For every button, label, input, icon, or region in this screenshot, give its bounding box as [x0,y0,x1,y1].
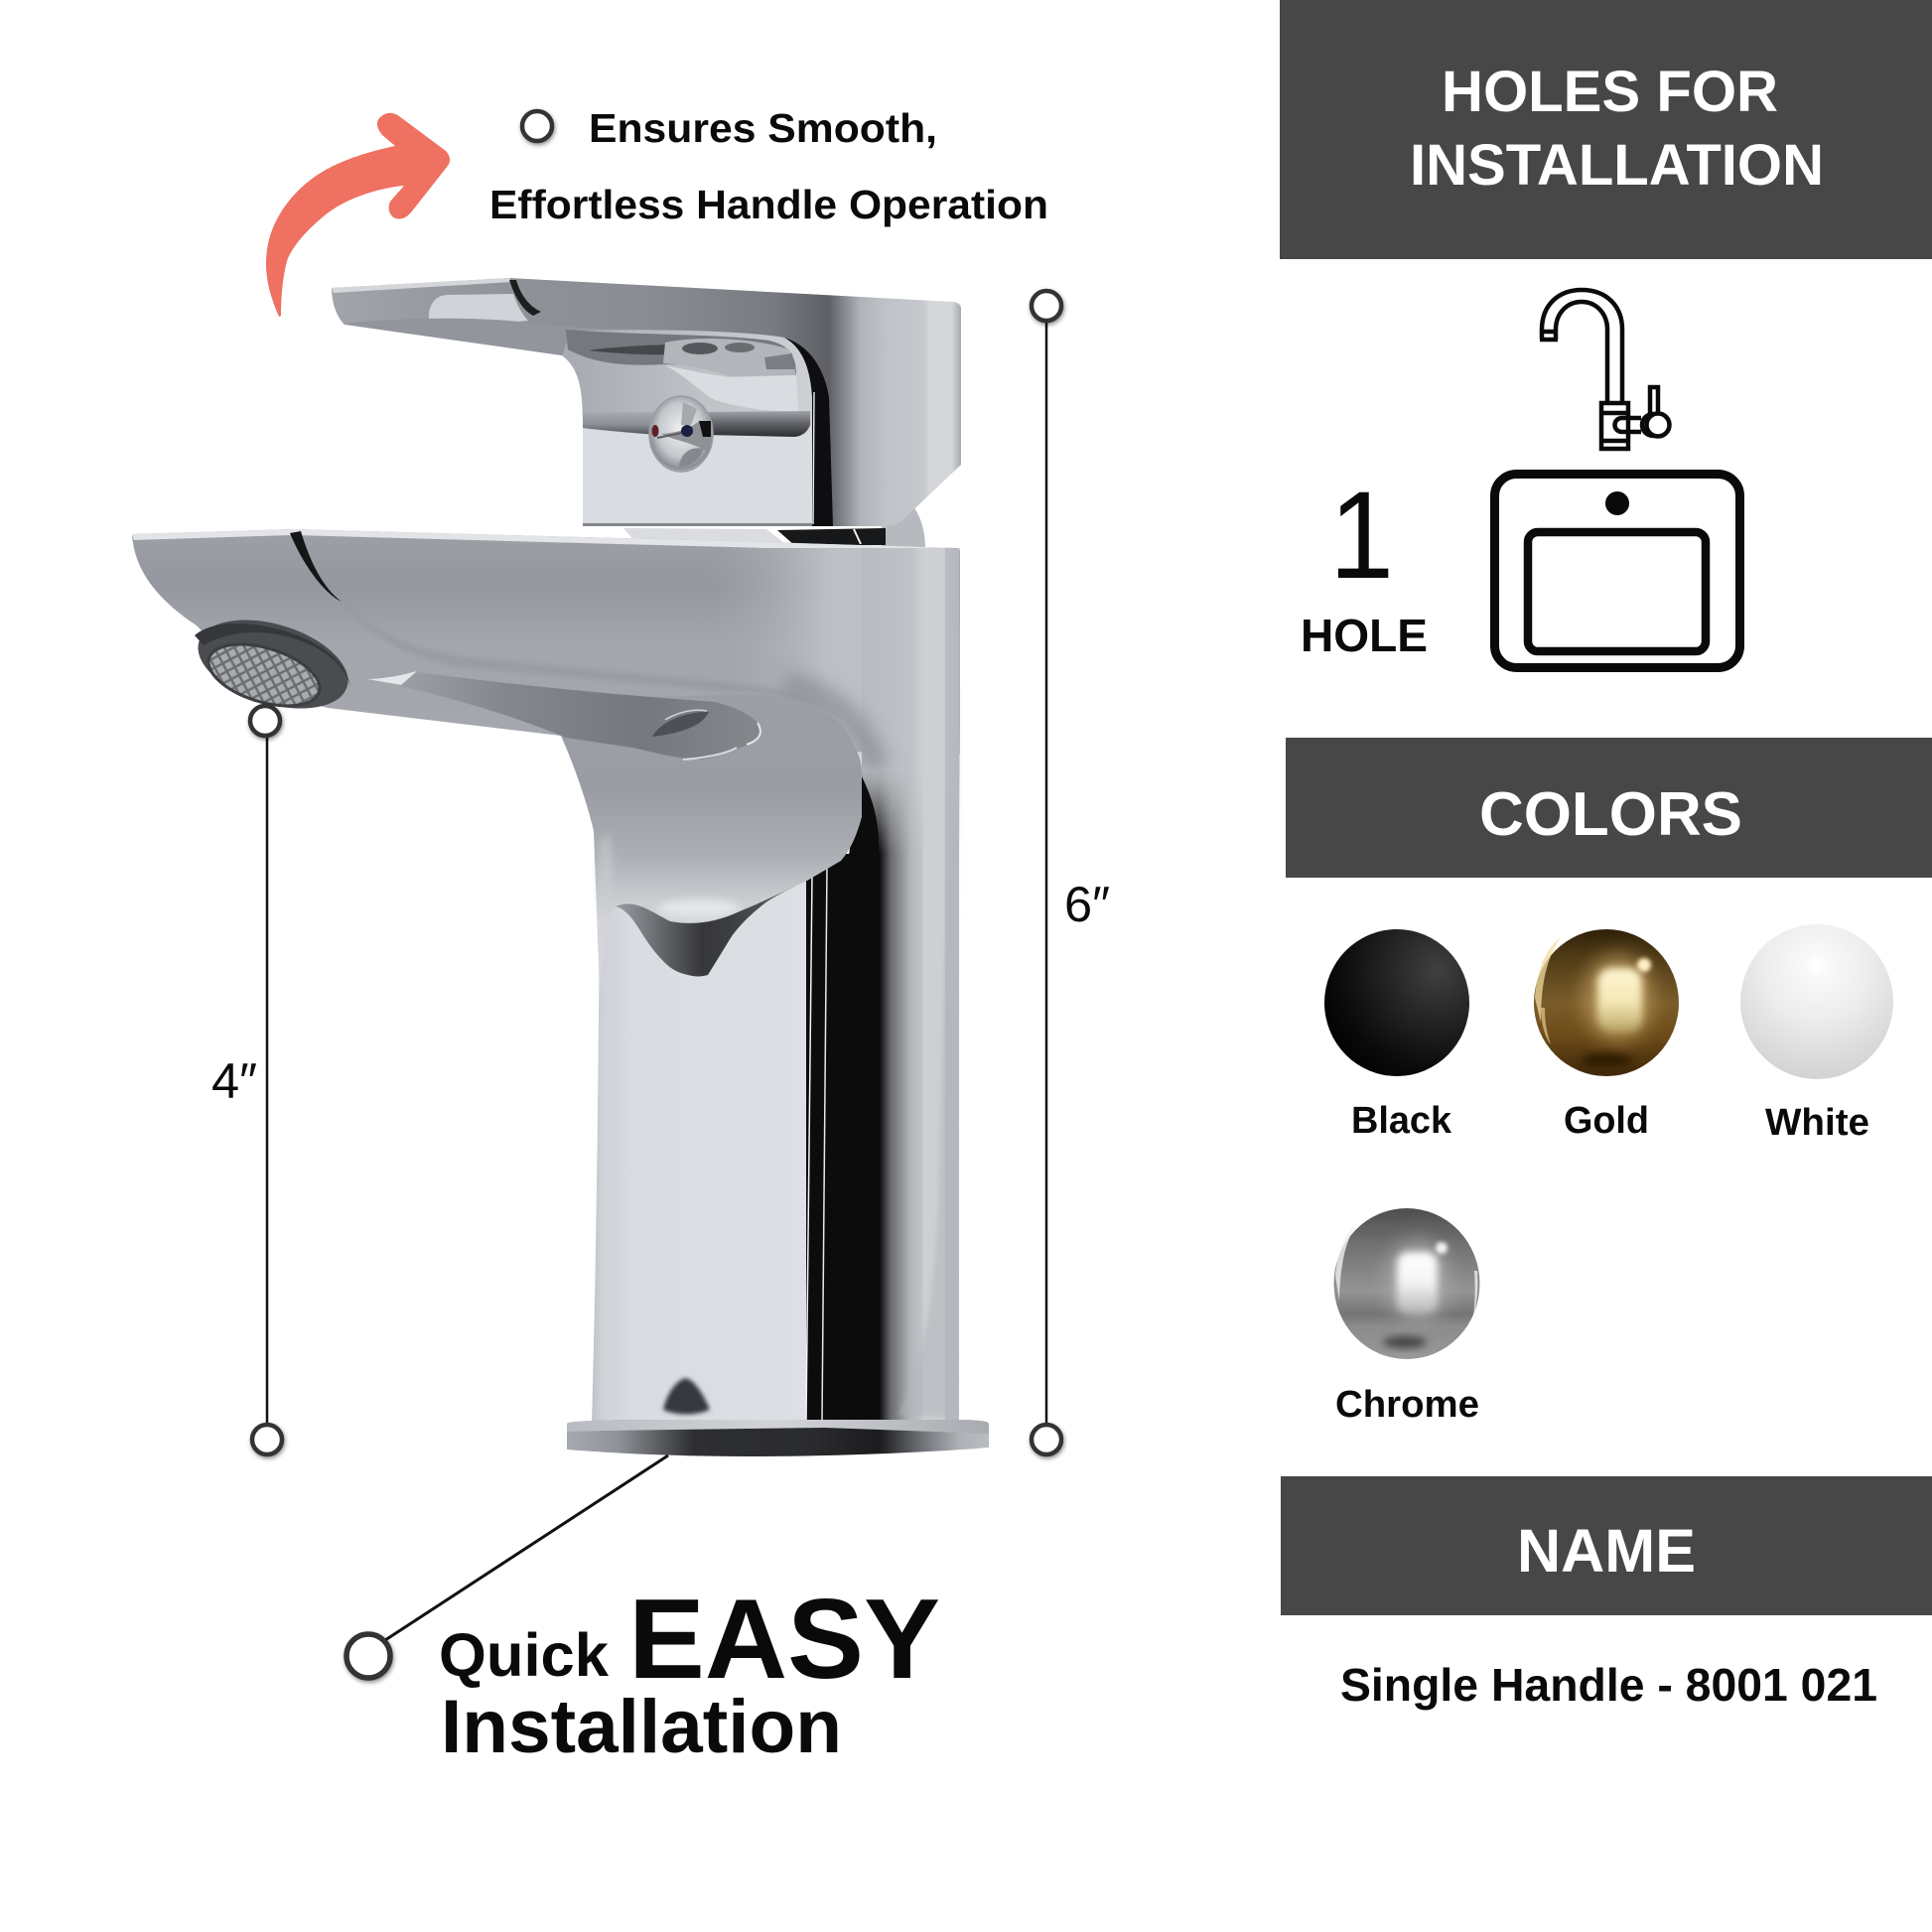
swatch: white: White [1765,1102,1869,1144]
text: 1 hole: HOLE [1301,610,1428,661]
dimension: 6 inch height: 6″ [1064,877,1110,932]
aerator [188,604,358,725]
callout: handle operation [489,105,1048,227]
swatch: gold [1534,929,1679,1142]
faucet lever handle [332,278,961,526]
swatch: chrome [1334,1208,1479,1426]
marker ring [346,1634,390,1678]
panel: colors header [1286,738,1932,878]
icon: sink with one hole [1495,475,1739,667]
hot/cold indicator button [649,396,713,472]
panel: holes for installation header: INSTALLATION [1410,133,1824,198]
panel: holes for installation header: HOLES FOR [1442,60,1778,124]
soft shadow outside the shoulder [784,685,878,769]
callout text line 1: Ensures Smooth, [589,105,937,151]
neck reflective panel [562,330,812,526]
leader line [385,1455,668,1640]
swatch: chrome: Chrome [1335,1384,1479,1426]
arrow: handle lift direction [266,113,450,317]
dimension: 6 inch height [1032,291,1110,1454]
panel: name header: NAME [1517,1517,1696,1585]
dark channel beside neck [784,338,833,526]
spout underside recess [367,672,760,759]
curved shoulder shadow [342,602,839,720]
faucet base plate [567,1420,989,1456]
swatch: white [1740,924,1893,1144]
swatch: black: Black [1351,1100,1452,1142]
Quick: Quick [439,1621,610,1690]
dark reflection blob at foot of body [663,1378,710,1414]
faucet spout [132,529,960,993]
EASY: EASY [628,1577,940,1703]
text: product name: Single Handle - 8001 021 [1340,1659,1877,1711]
spout drip reflection [616,881,807,977]
neck blob [561,694,862,993]
panel: name header [1281,1476,1932,1615]
Installation: Installation [441,1685,842,1769]
text: 1 hole [1301,467,1428,661]
black wedge beside neck blob [844,772,879,894]
dimension: 4 inch spout clearance [211,706,282,1454]
marker ring [522,111,552,141]
swatch: black [1324,929,1469,1142]
right shoulder light area [862,548,959,856]
callout text line 2: Effortless Handle Operation [489,182,1048,227]
spout rim highlight [132,529,957,548]
panel: holes for installation header [1280,0,1932,259]
swatch: gold: Gold [1564,1100,1649,1142]
panel: colors header: COLORS [1479,780,1742,849]
icon: faucet line art [1540,290,1670,449]
text: 1 hole: 1 [1329,467,1394,605]
illustration: chrome faucet [132,278,989,1456]
faucet handle neck collar [623,506,925,550]
faucet body column [592,655,959,1422]
callout: quick easy installation [346,1455,940,1769]
dimension: 4 inch spout clearance: 4″ [211,1053,257,1109]
